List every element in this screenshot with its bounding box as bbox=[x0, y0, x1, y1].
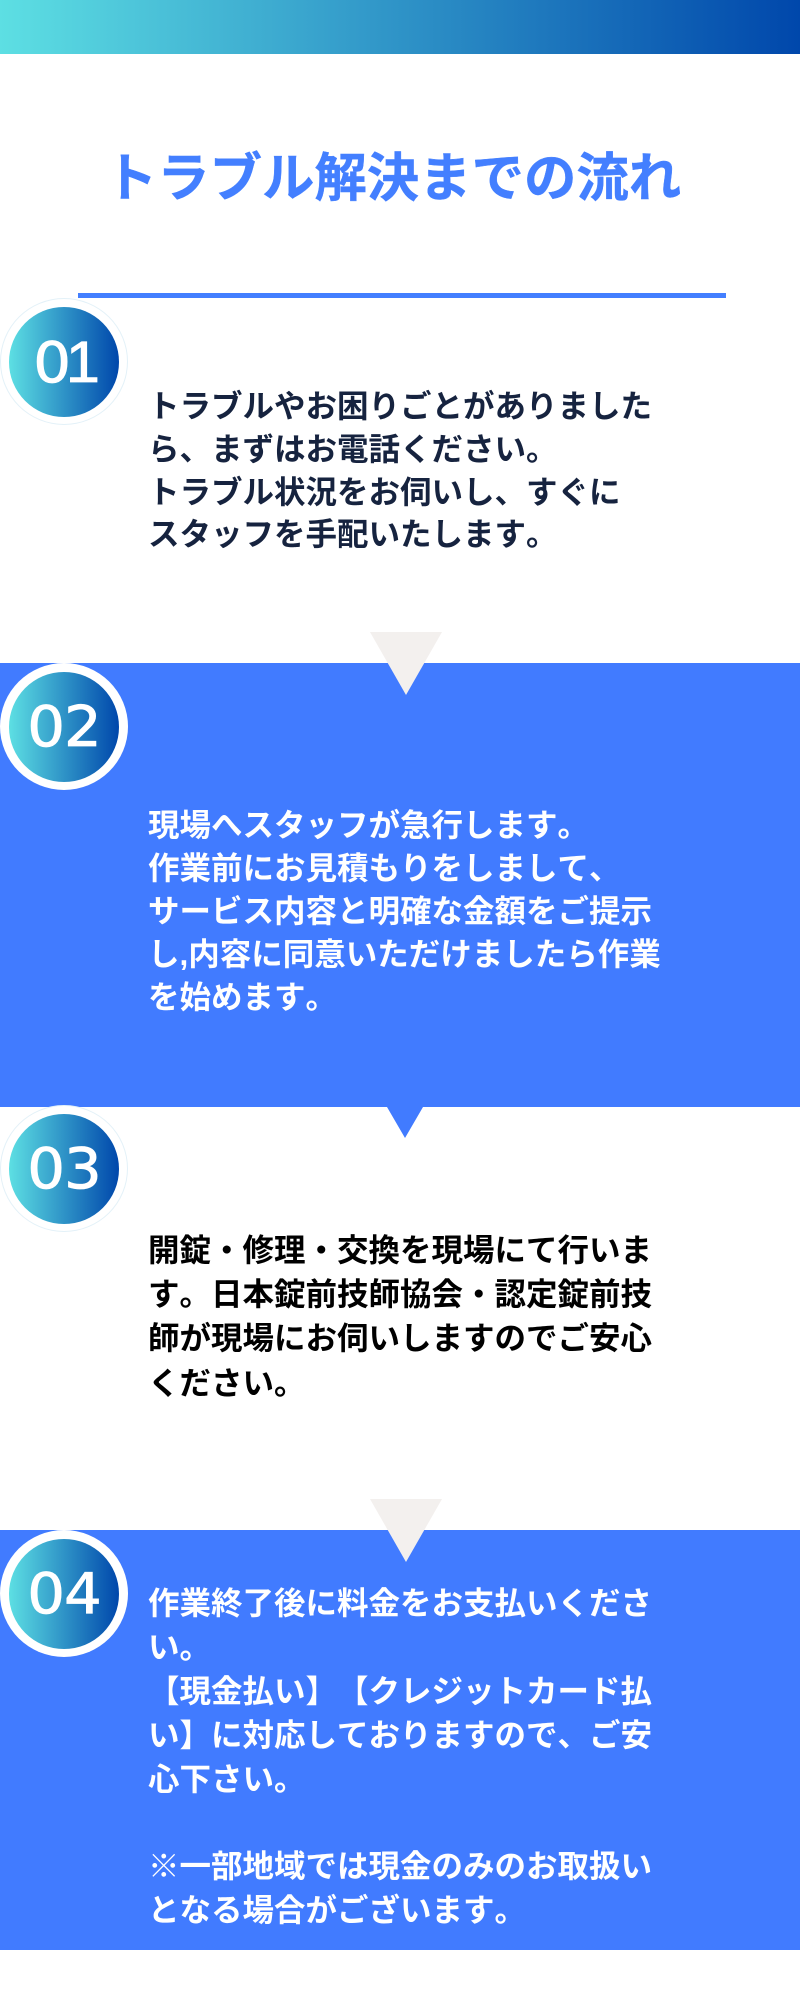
step 04 text: い。 bbox=[148, 1629, 211, 1665]
step 01 disc bbox=[9, 307, 119, 417]
step 03 number: 03 bbox=[27, 1137, 101, 1202]
step 04 text: ※一部地域では現金のみのお取扱い bbox=[148, 1848, 652, 1884]
step 01 text: スタッフを手配いたします。 bbox=[148, 516, 558, 552]
step 03 text: 師が現場にお伺いしますのでご安心 bbox=[148, 1320, 652, 1356]
step 02 text: 作業前にお見積もりをしまして、 bbox=[148, 850, 621, 886]
step 01 text: トラブルやお困りごとがありました bbox=[148, 388, 652, 424]
step 01 text: トラブル状況をお伺いし、すぐに bbox=[148, 474, 621, 510]
step 03 text: す。日本錠前技師協会・認定錠前技 bbox=[148, 1276, 652, 1312]
step 02 text bbox=[148, 807, 661, 1015]
title underline bbox=[78, 293, 726, 298]
step 04 text: 心下さい。 bbox=[148, 1761, 306, 1797]
top gradient bar bbox=[0, 0, 800, 54]
step 02 number: 02 bbox=[27, 695, 101, 760]
step 03 text bbox=[148, 1232, 652, 1401]
step 01 badge bbox=[0, 298, 128, 425]
step 03 text: 開錠・修理・交換を現場にて行いま bbox=[148, 1232, 652, 1268]
step 04 text: い】に対応しておりますので、ご安 bbox=[148, 1717, 652, 1753]
step 01 text bbox=[148, 388, 652, 552]
step 02 badge bbox=[0, 663, 128, 790]
step 04 number: 04 bbox=[27, 1562, 101, 1627]
step 01 text: ら、まずはお電話ください。 bbox=[148, 431, 558, 467]
arrow: step 03 to 04 bbox=[370, 1499, 442, 1562]
title: トラブル解決までの流れ bbox=[105, 150, 681, 208]
panel: step 04 bbox=[0, 1530, 800, 1950]
step 03 disc bbox=[9, 1114, 119, 1224]
step 04 disc bbox=[9, 1539, 119, 1649]
step 02 text: 現場へスタッフが急行します。 bbox=[148, 807, 589, 843]
step 04 text: 【現金払い】【クレジットカード払 bbox=[148, 1673, 652, 1709]
arrow: step 02 to 03 bbox=[387, 1107, 423, 1138]
step 04 badge bbox=[0, 1530, 128, 1657]
step 02 text: し,内容に同意いただけましたら作業 bbox=[148, 936, 661, 972]
arrow: step 01 to 02 bbox=[370, 632, 442, 695]
step 02 text: を始めます。 bbox=[148, 979, 337, 1015]
panel: step 02 bbox=[0, 663, 800, 1107]
step 04 text bbox=[148, 1585, 652, 1928]
step 04 text: 作業終了後に料金をお支払いくださ bbox=[148, 1585, 652, 1621]
step 04 text: となる場合がございます。 bbox=[148, 1892, 526, 1928]
step 02 disc bbox=[9, 672, 119, 782]
step 03 text: ください。 bbox=[148, 1365, 306, 1401]
step 01 number: 01 bbox=[33, 330, 95, 396]
step 02 text: サービス内容と明確な金額をご提示 bbox=[148, 893, 652, 929]
step 03 badge bbox=[0, 1105, 128, 1232]
